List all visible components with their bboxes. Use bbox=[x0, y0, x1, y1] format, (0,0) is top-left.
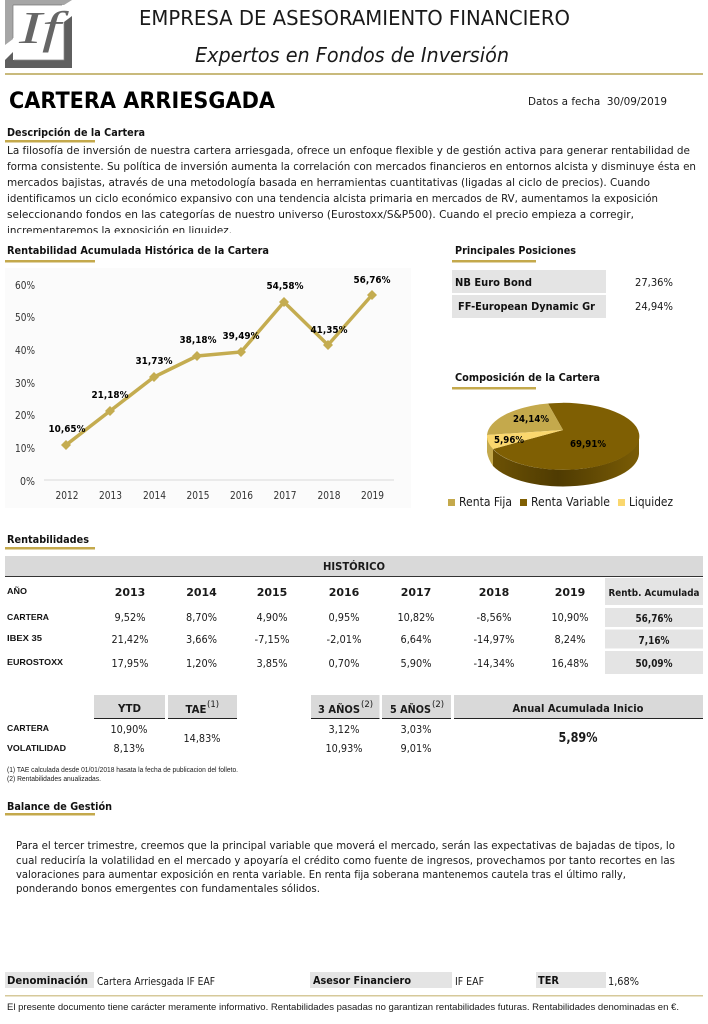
heading: description: Descripción de la Cartera bbox=[7, 126, 145, 139]
summary table: 10,93% bbox=[326, 742, 362, 755]
x axis labels: 2017 bbox=[274, 490, 296, 502]
y axis labels: 40% bbox=[15, 345, 35, 357]
review text: cual reduciría la volatilidad en el mercado y apoyaría el crédito como fuente de ingresos, provechamos por tanto recortes en las bbox=[16, 854, 675, 867]
summary table: YTD bbox=[117, 702, 141, 715]
historic table: 10,90% bbox=[552, 611, 588, 624]
historic table: -2,01% bbox=[326, 633, 362, 646]
date: Datos a fecha 30/09/2019 bbox=[528, 95, 667, 108]
historic table: 56,76% bbox=[636, 612, 672, 625]
historic table: 2014 bbox=[186, 586, 217, 599]
fund details: Denominación bbox=[7, 974, 88, 987]
historic table: 5,90% bbox=[400, 657, 432, 670]
historic table: 8,24% bbox=[554, 633, 586, 646]
fund details: 1,68% bbox=[608, 975, 639, 988]
portfolio heading: CARTERA ARRIESGADA bbox=[9, 89, 275, 114]
historic table: 2017 bbox=[401, 586, 431, 599]
historic table: 6,64% bbox=[400, 633, 432, 646]
footnotes: (1) TAE calculada desde 01/01/2018 hasata la fecha de publicacion del folleto. bbox=[7, 767, 238, 774]
data labels: 39,49% bbox=[222, 331, 260, 342]
summary table: 5 AÑOS bbox=[390, 703, 431, 716]
panel: portfolio composition bbox=[448, 371, 673, 509]
summary table: (2) bbox=[361, 700, 373, 710]
historic table: 50,09% bbox=[636, 657, 672, 670]
description text: mercados bajistas, através de una metodología basada en herramientas cuantitativas (ligadas al ciclo de precios). Cuando bbox=[7, 176, 650, 189]
historic table: 2015 bbox=[257, 586, 287, 599]
historic table: 10,82% bbox=[398, 611, 434, 624]
panel: top positions: NB Euro Bond bbox=[455, 276, 532, 289]
y axis labels: 60% bbox=[15, 280, 35, 292]
fund details: Cartera Arriesgada IF EAF bbox=[97, 975, 215, 988]
historic table: 3,66% bbox=[186, 633, 217, 646]
heading: composition: Composición de la Cartera bbox=[455, 371, 600, 384]
y axis labels: 20% bbox=[15, 410, 35, 422]
pie legend: Renta Variable bbox=[531, 495, 610, 509]
header rule bbox=[5, 73, 703, 75]
historic table: 0,70% bbox=[328, 657, 360, 670]
pie chart: 24,14% bbox=[513, 414, 549, 425]
historic table: 2016 bbox=[329, 586, 360, 599]
historic table: 17,95% bbox=[112, 657, 148, 670]
historic table: 21,42% bbox=[112, 633, 148, 646]
icon: company logo: If bbox=[18, 2, 70, 53]
y axis labels: 30% bbox=[15, 378, 35, 390]
summary table bbox=[7, 695, 703, 755]
summary table: (2) bbox=[432, 700, 444, 710]
data labels: 41,35% bbox=[310, 325, 348, 336]
historic table: -8,56% bbox=[476, 611, 512, 624]
panel: top positions: FF-European Dynamic Gr bbox=[458, 300, 596, 313]
summary table: 8,13% bbox=[114, 742, 144, 755]
pie chart: 69,91% bbox=[570, 439, 606, 450]
historic table: 9,52% bbox=[114, 611, 146, 624]
description text: La filosofía de inversión de nuestra cartera arriesgada, ofrece un enfoque flexible y de gestión activa para generar rentabilidad de bbox=[7, 144, 690, 157]
panel: top positions: 24,94% bbox=[635, 300, 673, 313]
x axis labels: 2018 bbox=[318, 490, 340, 502]
panel: top positions: 27,36% bbox=[635, 276, 673, 289]
panel: description bbox=[5, 126, 696, 237]
historic table: CARTERA bbox=[7, 612, 49, 622]
pie legend bbox=[448, 495, 673, 509]
historic table: -7,15% bbox=[254, 633, 290, 646]
summary table: 10,90% bbox=[110, 723, 148, 736]
pie legend: Renta Fija bbox=[459, 495, 512, 509]
summary table: Anual Acumulada Inicio bbox=[512, 702, 644, 715]
fund details: TER bbox=[538, 974, 559, 987]
pie legend: Liquidez bbox=[629, 495, 673, 509]
data labels bbox=[48, 275, 390, 435]
y axis labels: 10% bbox=[15, 443, 35, 455]
summary table: CARTERA bbox=[7, 723, 49, 733]
fund details bbox=[5, 972, 639, 988]
summary table: 3 AÑOS bbox=[318, 703, 360, 716]
historic table: EUROSTOXX bbox=[7, 657, 63, 667]
title: EMPRESA DE ASESORAMIENTO FINANCIERO bbox=[139, 6, 570, 30]
data labels: 21,18% bbox=[92, 390, 128, 401]
historic table: IBEX 35 bbox=[7, 633, 42, 643]
disclaimer: El presente documento tiene carácter meramente informativo. Rentabilidades pasadas no garantizan rentabilidades futuras. Rentabilidades denominadas en €. bbox=[7, 1002, 679, 1013]
review text: valoraciones para aumentar exposición en renta variable. En renta fija soberana mantenemos cautela tras el último rally, bbox=[16, 868, 626, 881]
panel: top positions bbox=[452, 244, 673, 318]
data labels: 56,76% bbox=[354, 275, 390, 286]
summary table: (1) bbox=[207, 700, 219, 710]
pie chart: 5,96% bbox=[494, 435, 524, 446]
data labels: 31,73% bbox=[136, 356, 172, 367]
heading: returns: Rentabilidades bbox=[7, 533, 89, 546]
subtitle: Expertos en Fondos de Inversión bbox=[195, 43, 509, 67]
summary table: TAE bbox=[186, 703, 206, 716]
panel: returns bbox=[5, 533, 703, 783]
historic table: HISTÓRICO bbox=[323, 560, 385, 573]
y axis labels: 0% bbox=[20, 476, 35, 488]
x axis labels: 2015 bbox=[186, 490, 210, 502]
y axis labels: 50% bbox=[15, 312, 35, 324]
fund details: IF EAF bbox=[455, 975, 484, 988]
review text: ponderando bonos emergentes con fundamentales sólidos. bbox=[16, 882, 320, 895]
x axis labels: 2019 bbox=[361, 490, 384, 502]
historic table: 0,95% bbox=[328, 611, 360, 624]
historic table: 16,48% bbox=[552, 657, 588, 670]
data labels: 38,18% bbox=[180, 335, 216, 346]
summary table: VOLATILIDAD bbox=[7, 743, 66, 753]
footnotes bbox=[7, 767, 238, 783]
historic table: 2013 bbox=[115, 586, 145, 599]
historic table: -14,34% bbox=[474, 657, 514, 670]
historic table: -14,97% bbox=[474, 633, 514, 646]
x axis labels: 2012 bbox=[56, 490, 78, 502]
description text: incrementaremos la exposición en liquidez. bbox=[7, 224, 232, 237]
description text: identificamos un ciclo económico expansivo con una tendencia alcista primaria en mercados de RV, aumentamos la exposición bbox=[7, 192, 658, 205]
pie chart bbox=[487, 403, 639, 486]
historic table: 8,70% bbox=[186, 611, 217, 624]
line series bbox=[66, 295, 372, 445]
footer rule bbox=[5, 995, 703, 996]
heading: management review: Balance de Gestión bbox=[7, 800, 112, 813]
fund details: Asesor Financiero bbox=[313, 974, 411, 987]
x axis labels: 2016 bbox=[230, 490, 253, 502]
historic table bbox=[5, 556, 703, 674]
review text: Para el tercer trimestre, creemos que la principal variable que moverá el mercado, serán las expectativas de bajadas de tipos, lo bbox=[16, 839, 675, 852]
data labels: 10,65% bbox=[48, 424, 86, 435]
historic table: AÑO bbox=[7, 586, 27, 596]
summary table: 9,01% bbox=[400, 742, 432, 755]
description text bbox=[7, 144, 696, 237]
panel: cumulative return chart bbox=[5, 244, 411, 508]
x axis labels bbox=[56, 490, 384, 502]
markers bbox=[61, 290, 377, 450]
heading: cumulative return: Rentabilidad Acumulada Histórica de la Cartera bbox=[7, 244, 269, 257]
data labels: 54,58% bbox=[266, 281, 304, 292]
historic table: 2018 bbox=[479, 586, 509, 599]
x axis labels: 2014 bbox=[143, 490, 166, 502]
historic table: 4,90% bbox=[256, 611, 288, 624]
summary table: 14,83% bbox=[184, 732, 220, 745]
historic table: 1,20% bbox=[186, 657, 217, 670]
historic table: 2019 bbox=[555, 586, 585, 599]
review text bbox=[16, 839, 675, 895]
summary table: 3,03% bbox=[400, 723, 432, 736]
icon: company logo bbox=[5, 0, 72, 68]
summary table: 3,12% bbox=[328, 723, 360, 736]
x axis labels: 2013 bbox=[99, 490, 122, 502]
panel: management review bbox=[5, 800, 675, 895]
historic table: 3,85% bbox=[256, 657, 288, 670]
description text: seleccionando fondos en las categorías de nuestro universo (Eurostoxx/S&P500). Cuando el precio empieza a corregir, bbox=[7, 208, 634, 221]
y axis labels bbox=[15, 280, 35, 488]
historic table: 7,16% bbox=[638, 634, 670, 647]
heading: top positions: Principales Posiciones bbox=[455, 244, 576, 257]
summary table: 5,89% bbox=[558, 731, 598, 746]
footnotes: (2) Rentabilidades anualizadas. bbox=[7, 776, 101, 783]
